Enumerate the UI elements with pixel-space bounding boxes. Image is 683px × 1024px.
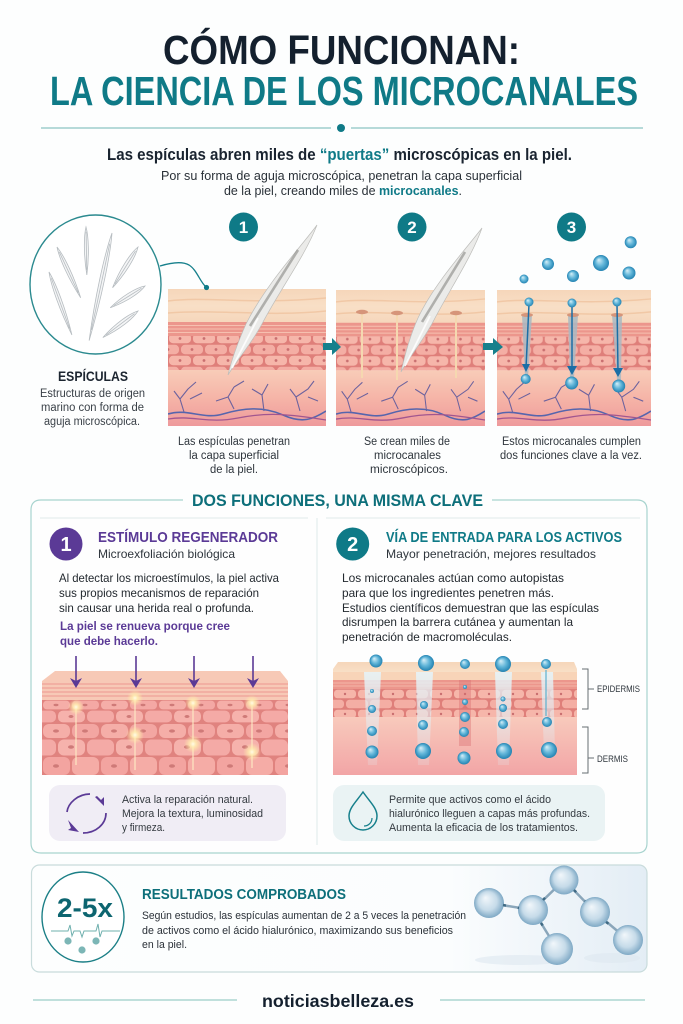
intro text: Por su forma de aguja microscópica, penetran la capa superficial [161, 169, 522, 183]
panel: spicules magnified circle [30, 215, 161, 354]
body text [59, 571, 279, 615]
callout: reparación natural [49, 785, 286, 841]
skin panel 1 with spicule [168, 225, 326, 426]
heading: vía de entrada: VÍA DE ENTRADA PARA LOS ACTIVOS [386, 529, 622, 546]
results text: en la piel. [142, 939, 187, 951]
caption step 1: de la piel. [210, 464, 258, 476]
body text: disrumpen la barrera cutánea y aumentan la [342, 615, 573, 629]
results text: Según estudios, las espículas aumentan de 2 a 5 veces la penetración [142, 910, 466, 922]
purple highlight text: La piel se renueva porque cree [60, 619, 230, 633]
subtitle: Las espículas abren miles de “puertas” microscópicas en la piel. [107, 145, 572, 164]
panel: estímulo regenerador [42, 528, 288, 841]
heading: resultados: RESULTADOS COMPROBADOS [142, 887, 346, 903]
icon: water drop [349, 792, 377, 830]
number badge 1 [50, 528, 82, 560]
callout text [122, 794, 263, 834]
text: espículas description [40, 388, 145, 428]
epidermis bracket and label [582, 669, 640, 709]
title [50, 27, 638, 114]
skin panel 3 with microchannels and actives [497, 236, 651, 426]
callout text: Aumenta la eficacia de los tratamientos. [389, 822, 578, 834]
results text [142, 910, 466, 951]
badge: 2-5x: 2-5x [57, 893, 113, 923]
caption step 3: dos funciones clave a la vez. [500, 450, 642, 462]
step 1 number: 1 [239, 218, 248, 237]
body text: Los microcanales actúan como autopistas [342, 571, 564, 585]
epidermis bracket and label: EPIDERMIS [597, 684, 640, 694]
body text [342, 571, 599, 644]
dermis bracket and label [582, 727, 628, 773]
heading: espículas: ESPÍCULAS [58, 368, 128, 384]
skin illustration with glow points [42, 671, 288, 775]
callout text [389, 794, 590, 834]
title: CÓMO FUNCIONAN: [163, 27, 520, 73]
step 2 number: 2 [407, 218, 417, 237]
dermis bracket and label: DERMIS [597, 754, 628, 764]
number badge 2 [336, 528, 369, 560]
body text: penetración de macromoléculas. [342, 630, 512, 644]
caption step 3: Estos microcanales cumplen [502, 436, 641, 448]
skin illustration with active ingredients [333, 654, 577, 775]
intro text: de la piel, creando miles de microcanales. [224, 184, 462, 198]
caption step 2 [364, 436, 450, 476]
body text: para que los ingredientes penetren más. [342, 586, 554, 600]
badge: 2-5x [42, 872, 124, 962]
heading: dos funciones: DOS FUNCIONES, UNA MISMA CLAVE [192, 491, 483, 510]
icon: renewal cycle [67, 794, 106, 833]
callout: ácido hialurónico [333, 785, 605, 841]
body text: sin causar una herida real o profunda. [59, 601, 254, 615]
number badge 1: 1 [60, 534, 72, 556]
intro text [161, 169, 522, 198]
caption step 2: microcanales [374, 450, 441, 462]
arrow: step 2 to 3 [483, 338, 503, 355]
callout text: hialurónico lleguen a capas más profundas. [389, 808, 590, 820]
step 3 number: 3 [567, 218, 576, 237]
callout text: Permite que activos como el ácido [389, 794, 551, 806]
results text: de activos como el ácido hialurónico, maximizando sus beneficios [142, 925, 453, 937]
skin panel 2 with channels [336, 228, 485, 426]
heading: estímulo regenerador: ESTÍMULO REGENERADOR [98, 529, 278, 546]
text: espículas description: marino con forma de [41, 402, 144, 414]
arrows: stimuli into skin [70, 656, 259, 688]
footer: site name: noticiasbelleza.es [262, 991, 414, 1011]
subheading: Mayor penetración, mejores resultados [386, 547, 596, 561]
callout text: y firmeza. [122, 822, 165, 834]
connector from circle to skin [160, 263, 209, 290]
number badge 2: 2 [347, 534, 358, 556]
caption step 2: Se crean miles de [364, 436, 450, 448]
callout text: Mejora la textura, luminosidad [122, 808, 263, 820]
icon: hyaluronic molecule [474, 866, 643, 965]
text: espículas description: aguja microscópica. [44, 416, 140, 428]
purple highlight text [60, 619, 230, 648]
subheading: Microexfoliación biológica [98, 547, 235, 561]
body text: Estudios científicos demuestran que las espículas [342, 601, 599, 615]
caption step 1: Las espículas penetran [178, 436, 290, 448]
text: espículas description: Estructuras de origen [40, 388, 145, 400]
callout text: Activa la reparación natural. [122, 794, 253, 806]
panel: vía de entrada [333, 528, 640, 841]
body text: Al detectar los microestímulos, la piel activa [59, 571, 279, 585]
body text: sus propios mecanismos de reparación [59, 586, 259, 600]
step 1 number [229, 212, 258, 242]
step 2 number [398, 212, 426, 242]
caption step 2: microscópicos. [370, 464, 448, 476]
panel: dos funciones frame [31, 500, 647, 853]
purple highlight text: que debe hacerlo. [60, 634, 158, 648]
panel: resultados comprobados [32, 865, 647, 972]
caption step 1 [178, 436, 290, 476]
caption step 3 [500, 436, 642, 462]
arrow: step 1 to 2 [323, 338, 341, 355]
step 3 number [557, 212, 586, 242]
caption step 1: la capa superficial [189, 450, 279, 462]
